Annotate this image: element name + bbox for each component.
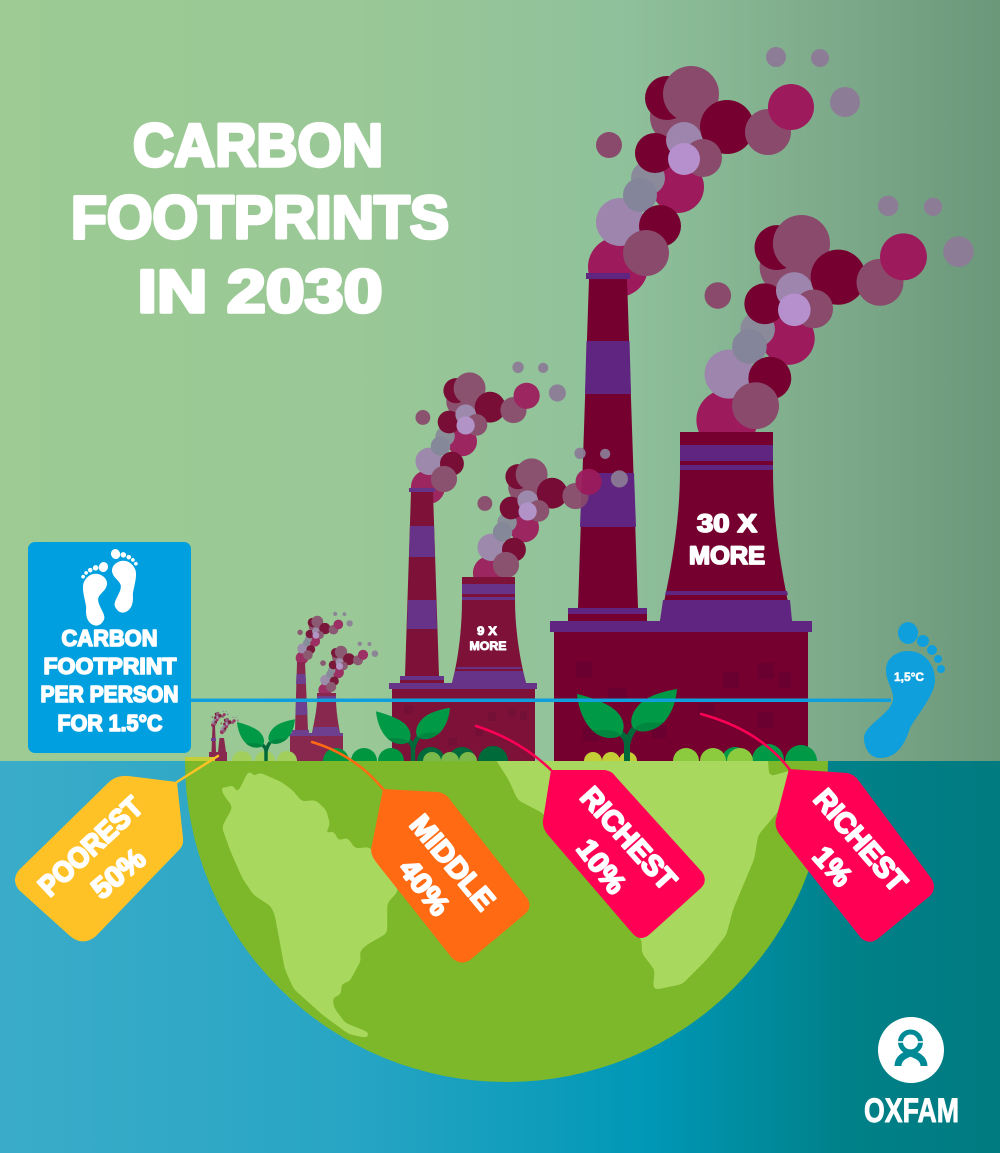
plant: large — [577, 689, 677, 761]
smoke: richest 1% cooling tower — [696, 196, 974, 451]
smoke: richest 10% cooling tower — [473, 448, 628, 590]
factory wall — [389, 683, 537, 761]
panel text: PER PERSON — [40, 681, 178, 707]
smoke: middle 40% cooling tower — [318, 642, 378, 697]
icon: blue footprint 1.5°C: 1,5°C — [894, 670, 924, 684]
tag: richest 10% — [543, 770, 705, 938]
smoke: richest 1% chimney — [588, 47, 860, 297]
tag: middle 40%: 40% — [392, 854, 456, 922]
title: IN 2030 — [138, 258, 382, 325]
label: 30 x more: 30 X — [697, 510, 757, 538]
title: CARBON — [133, 112, 383, 179]
tag: richest 10%: RICHEST — [574, 781, 682, 897]
globe — [185, 750, 828, 1082]
factory: middle 40% — [289, 662, 343, 761]
tag string: richest 10% — [476, 726, 551, 770]
tag string: poorest — [177, 756, 218, 782]
title — [71, 112, 449, 325]
background: sky — [0, 0, 1000, 761]
tag string: middle — [312, 742, 383, 789]
smoke: poorest 50% tower — [220, 717, 239, 734]
label: 9 x more: 9 X — [477, 624, 497, 638]
tag: richest 1%: RICHEST — [807, 783, 913, 899]
tag: middle 40%: MIDDLE — [403, 809, 501, 917]
big cooling tower — [660, 432, 792, 621]
title: FOOTPRINTS — [71, 184, 449, 251]
label: 30 x more — [689, 510, 765, 570]
smoke: poorest 50% chimney — [211, 711, 229, 727]
panel: carbon footprint per person — [28, 542, 191, 753]
icon: pair of footprints — [66, 543, 153, 628]
bushes: middle 40% — [232, 751, 297, 771]
background: sea — [0, 761, 1000, 1153]
tag: richest 1% — [776, 769, 934, 942]
panel text: FOOTPRINT — [44, 653, 176, 679]
medium cooling tower — [452, 577, 526, 683]
panel text: FOR 1.5°C — [58, 710, 162, 736]
bushes: richest 1% — [584, 744, 817, 777]
tag: poorest 50% — [15, 776, 183, 942]
panel text: CARBON — [62, 625, 158, 651]
plant: small — [237, 719, 295, 761]
tag: richest 10%: 10% — [570, 833, 632, 901]
label: 30 x more: MORE — [689, 542, 765, 570]
big chimney — [568, 273, 647, 621]
tag: poorest 50%: 50% — [86, 842, 152, 906]
logo figure — [897, 1032, 924, 1066]
factory: richest 10% — [389, 488, 537, 761]
footprint threshold line — [191, 698, 891, 702]
logo: oxfam: OXFAM — [864, 1092, 959, 1130]
smoke: richest 10% chimney — [411, 362, 566, 504]
label: 9 x more: MORE — [470, 639, 506, 653]
plant: medium — [376, 708, 450, 761]
logo: oxfam — [864, 1017, 959, 1130]
tag: poorest 50%: POOREST — [33, 791, 150, 903]
factory wall — [550, 621, 812, 761]
factory: richest 1% — [550, 273, 812, 761]
medium chimney — [400, 488, 444, 683]
label: 9 x more — [470, 624, 506, 653]
icon: blue footprint 1.5°C — [864, 622, 945, 758]
tag string: richest 1% — [701, 714, 790, 770]
panel text — [40, 625, 178, 736]
bushes: richest 10% — [323, 746, 508, 776]
tag: richest 1%: 1% — [806, 841, 858, 893]
factory: poorest 50% — [209, 725, 227, 761]
continents — [210, 750, 792, 1038]
tag: middle 40% — [371, 789, 530, 963]
smoke: middle 40% chimney — [296, 612, 353, 664]
